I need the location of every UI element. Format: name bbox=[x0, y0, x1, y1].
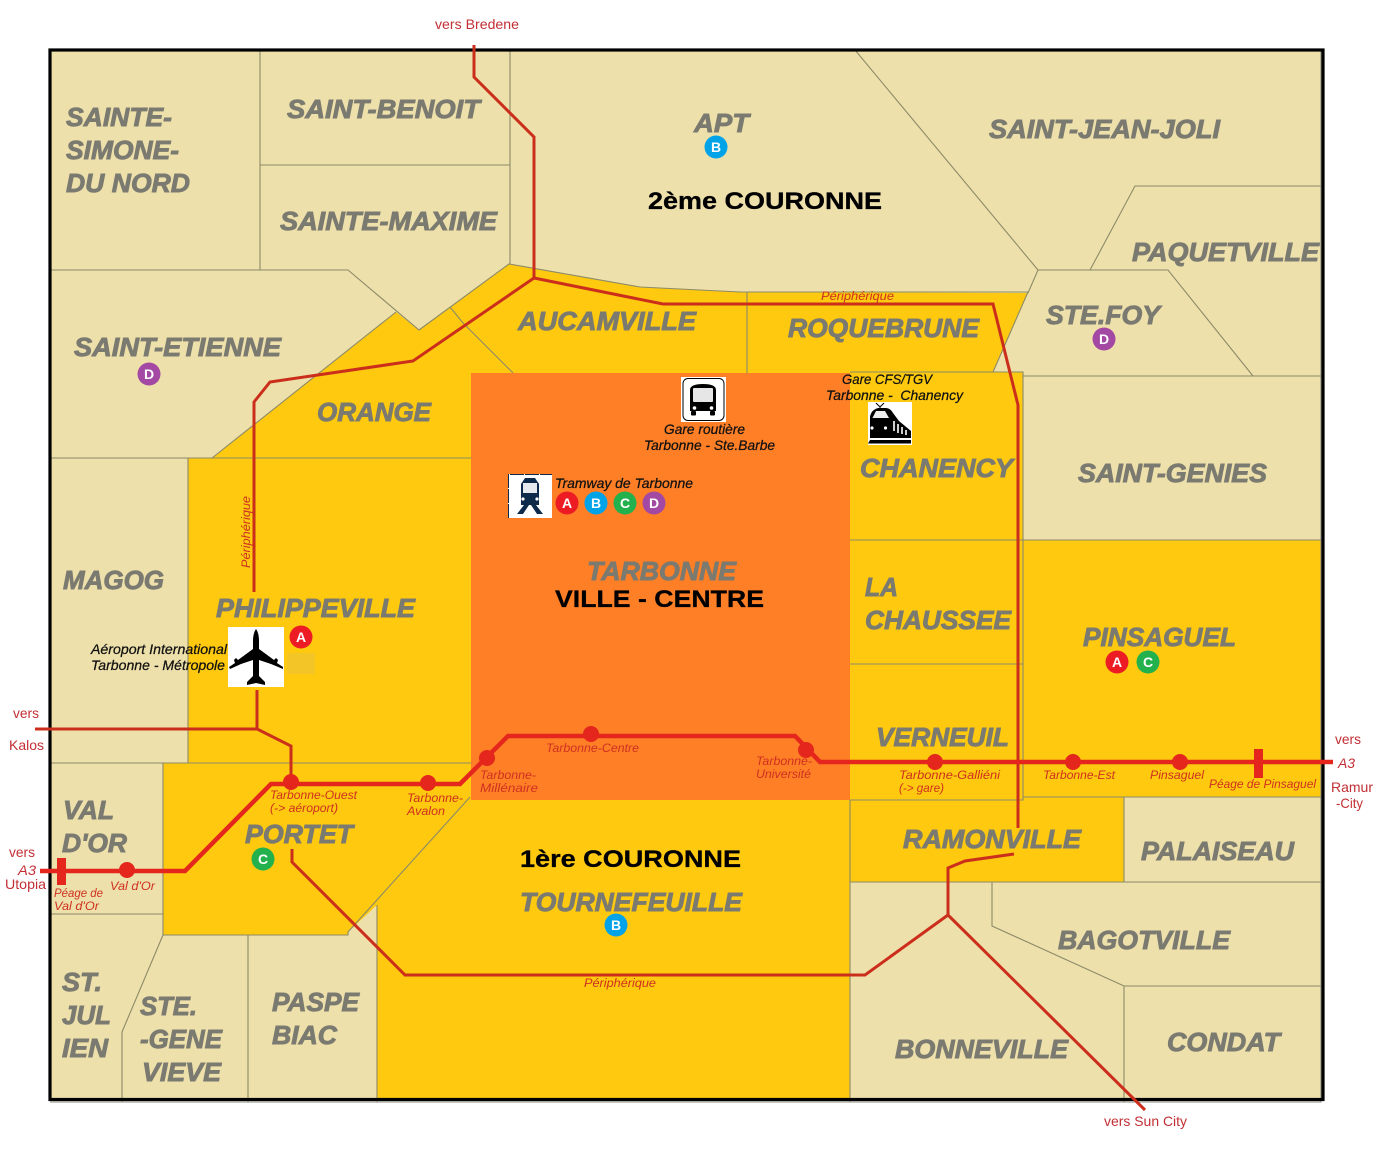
road and station labels: Val d'Or bbox=[110, 879, 156, 893]
outside destination labels: A3 bbox=[1337, 755, 1355, 771]
commune names: LA bbox=[865, 572, 898, 602]
outside destination labels: Ramur bbox=[1331, 779, 1373, 795]
commune names: CHANENCY bbox=[860, 453, 1016, 483]
commune names: SAINT-JEAN-JOLI bbox=[989, 114, 1221, 144]
commune names: CHAUSSEE bbox=[865, 605, 1012, 635]
icon: tram bbox=[508, 474, 552, 518]
commune names: TARBONNE bbox=[587, 556, 737, 586]
icon: plane bbox=[228, 627, 284, 687]
icon: bus bbox=[681, 377, 726, 422]
ring headings: VILLE - CENTRE bbox=[555, 586, 764, 613]
road and station labels bbox=[54, 289, 1316, 990]
tram line badges: D bbox=[1099, 331, 1109, 347]
commune names: PORTET bbox=[245, 819, 355, 849]
ring headings: 2ème COURONNE bbox=[648, 188, 882, 215]
commune names: SAINT-GENIES bbox=[1078, 458, 1268, 488]
commune names: -GENE bbox=[140, 1024, 223, 1054]
transport hub labels: Gare routière bbox=[664, 421, 745, 437]
commune names: RAMONVILLE bbox=[903, 824, 1082, 854]
commune names: CONDAT bbox=[1167, 1027, 1282, 1057]
tram line badges bbox=[138, 136, 1160, 936]
transport hub labels: Tarbonne - Métropole bbox=[91, 657, 225, 673]
road and station labels: Périphérique bbox=[821, 289, 894, 303]
commune names: MAGOG bbox=[63, 565, 164, 595]
road and station labels: Val d'Or bbox=[54, 899, 100, 913]
transport hub labels: Aéroport International bbox=[90, 641, 228, 657]
road and station labels: Périphérique bbox=[239, 496, 253, 568]
tram line badges: D bbox=[649, 495, 659, 511]
commune names: ORANGE bbox=[317, 397, 432, 427]
outside destination labels: Utopia bbox=[5, 876, 46, 892]
transport hub labels: Gare CFS/TGV bbox=[842, 371, 934, 387]
tram line badges: C bbox=[620, 495, 630, 511]
road and station labels: Tarbonne-Galliéni bbox=[899, 768, 1000, 782]
outside destination labels: vers Bredene bbox=[435, 16, 519, 32]
tram line badges: D bbox=[144, 366, 154, 382]
commune names: DU NORD bbox=[66, 168, 190, 198]
road and station labels: Tarbonne- bbox=[407, 791, 463, 805]
commune names: VAL bbox=[63, 795, 114, 825]
tram line badges: C bbox=[258, 851, 268, 867]
commune names: AUCAMVILLE bbox=[517, 306, 697, 336]
tram line badges: B bbox=[611, 917, 621, 933]
ring headings bbox=[520, 188, 882, 873]
commune names: ST. bbox=[62, 967, 102, 997]
tram line badges: C bbox=[1143, 654, 1153, 670]
commune names: PINSAGUEL bbox=[1083, 622, 1236, 652]
tram line badges: A bbox=[562, 495, 572, 511]
commune names: BIAC bbox=[272, 1020, 338, 1050]
commune names: APT bbox=[693, 108, 751, 138]
outside destination labels: vers Sun City bbox=[1104, 1113, 1187, 1129]
outside destination labels: vers bbox=[9, 844, 35, 860]
outside destination labels: vers bbox=[13, 705, 39, 721]
road and station labels: Tarbonne-Ouest bbox=[270, 788, 358, 802]
ring headings: 1ère COURONNE bbox=[520, 846, 741, 873]
commune names: BONNEVILLE bbox=[895, 1034, 1069, 1064]
transport hub labels: Tramway de Tarbonne bbox=[555, 475, 693, 491]
tram line badges: B bbox=[711, 139, 721, 155]
commune names: VERNEUIL bbox=[876, 722, 1009, 752]
road and station labels: Tarbonne-Centre bbox=[546, 741, 639, 755]
road and station labels: Millénaire bbox=[480, 781, 538, 795]
road and station labels: Tarbonne-Est bbox=[1043, 768, 1116, 782]
commune names: BAGOTVILLE bbox=[1058, 925, 1231, 955]
commune names: SAINTE- bbox=[66, 102, 172, 132]
road and station labels: Université bbox=[756, 767, 811, 781]
tram line badges: A bbox=[1112, 654, 1122, 670]
road and station labels: Avalon bbox=[406, 804, 445, 818]
commune names: VIEVE bbox=[142, 1057, 222, 1087]
commune names: SAINT-ETIENNE bbox=[74, 332, 282, 362]
transport hub labels: Tarbonne - Chanency bbox=[826, 387, 964, 403]
transport hub labels: Tarbonne - Ste.Barbe bbox=[644, 437, 775, 453]
road and station labels: Périphérique bbox=[584, 976, 656, 990]
outside destination labels: -City bbox=[1336, 795, 1363, 811]
outside destination labels: A3 bbox=[17, 862, 36, 878]
commune names: TOURNEFEUILLE bbox=[520, 887, 743, 917]
commune names: STE. bbox=[140, 991, 197, 1021]
commune names: STE.FOY bbox=[1046, 300, 1163, 330]
outside destination labels: Kalos bbox=[9, 737, 44, 753]
commune names: ROQUEBRUNE bbox=[788, 313, 980, 343]
commune names: SIMONE- bbox=[66, 135, 179, 165]
icon: train bbox=[868, 402, 912, 445]
road and station labels: Tarbonne- bbox=[480, 768, 536, 782]
faint square near airport bbox=[287, 653, 315, 674]
road and station labels: Tarbonne- bbox=[756, 754, 812, 768]
road and station labels: Péage de bbox=[54, 886, 103, 900]
road and station labels: (-> gare) bbox=[899, 781, 944, 795]
road and station labels: Pinsaguel bbox=[1150, 768, 1204, 782]
tram and motorway line A3 bbox=[40, 726, 1333, 885]
commune names: SAINT-BENOIT bbox=[287, 94, 482, 124]
outside destination labels: vers bbox=[1335, 731, 1361, 747]
commune names: PALAISEAU bbox=[1141, 836, 1295, 866]
commune names: PASPE bbox=[272, 987, 360, 1017]
commune names bbox=[62, 94, 1320, 1087]
road and station labels: (-> aéroport) bbox=[270, 801, 338, 815]
zone: 1ère couronne bbox=[163, 264, 1322, 1098]
transport hub labels bbox=[90, 371, 964, 673]
tram line badges: B bbox=[591, 495, 601, 511]
commune names: PAQUETVILLE bbox=[1132, 237, 1320, 267]
commune names: JUL bbox=[62, 1000, 111, 1030]
zone: ville-centre bbox=[471, 373, 850, 800]
tram line badges: A bbox=[296, 629, 306, 645]
ring road and motorways bbox=[35, 45, 1145, 1110]
commune names: SAINTE-MAXIME bbox=[280, 206, 498, 236]
commune names: PHILIPPEVILLE bbox=[216, 593, 416, 623]
commune names: D'OR bbox=[62, 828, 127, 858]
road and station labels: Péage de Pinsaguel bbox=[1209, 777, 1316, 791]
commune names: IEN bbox=[62, 1033, 109, 1063]
